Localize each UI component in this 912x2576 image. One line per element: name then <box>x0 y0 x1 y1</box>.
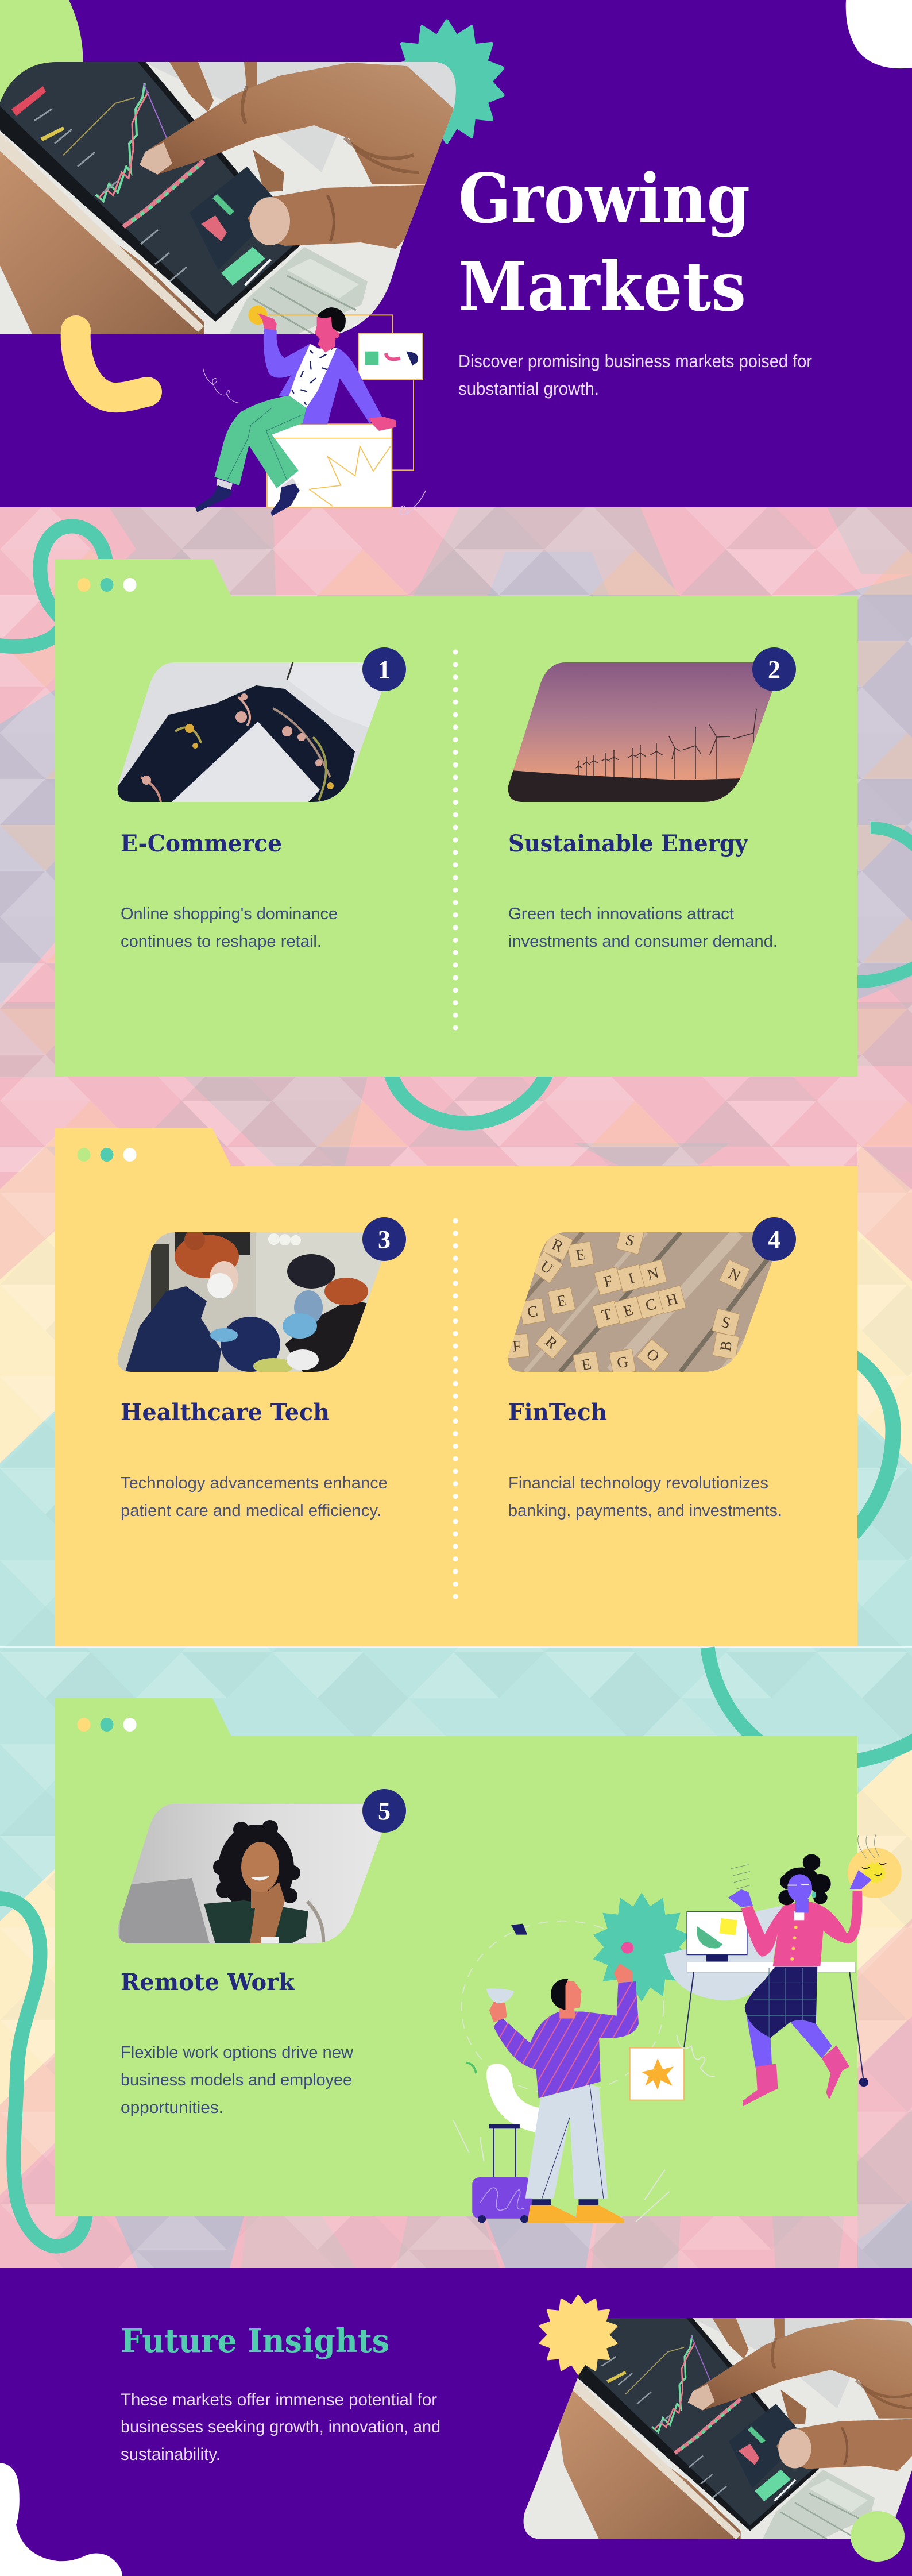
window dots <box>77 578 137 592</box>
panel: card 1 <box>55 559 857 1077</box>
photo: fintech scrabble tiles <box>508 1232 772 1372</box>
badge 5: 5 <box>378 1797 391 1825</box>
decorative teal rings <box>0 526 912 2246</box>
photo: fintech scrabble tiles: F <box>602 1272 615 1290</box>
decorative white blob <box>846 0 912 68</box>
heading: future insights: Future Insights <box>121 2322 389 2360</box>
text: fintech: Financial technology revolutionizes <box>508 1474 768 1493</box>
heading: healthcare tech: Healthcare Tech <box>121 1399 330 1426</box>
man figure <box>486 1964 639 2223</box>
photo: fintech scrabble tiles: B <box>717 1340 735 1352</box>
text: future insights: businesses seeking growth, innovation, and <box>121 2417 440 2436</box>
illustration: remote workers at desk <box>453 1834 902 2223</box>
photo: fintech scrabble tiles: C <box>643 1295 658 1314</box>
footer photo: phone trading chart <box>524 2318 912 2539</box>
text: e-commerce: continues to reshape retail. <box>121 932 322 951</box>
heading: fintech: FinTech <box>508 1399 607 1426</box>
title: Markets <box>458 246 746 326</box>
photo: fintech scrabble tiles: S <box>624 1231 636 1250</box>
heading: sustainable energy: Sustainable Energy <box>508 830 749 857</box>
photo: wind turbines at sunset <box>503 661 787 804</box>
text: fintech: banking, payments, and investments. <box>508 1502 782 1520</box>
photo: fintech scrabble tiles: E <box>580 1355 593 1374</box>
yellow starburst <box>532 2289 625 2380</box>
badge 3: 3 <box>378 1225 391 1254</box>
green circle <box>851 2511 905 2562</box>
photo: fintech scrabble tiles: O <box>643 1345 663 1366</box>
text: future insights <box>121 2390 440 2464</box>
green gear <box>582 1883 701 2011</box>
decorative green blob <box>0 0 83 115</box>
title: Growing <box>458 159 750 238</box>
heading: e-commerce: E-Commerce <box>121 830 282 857</box>
photo: fintech scrabble tiles: F <box>512 1337 522 1355</box>
decorative yellow crescent <box>76 330 147 398</box>
text: remote work <box>121 2043 354 2117</box>
photo: e-commerce scarf <box>115 661 399 804</box>
badge 2: 2 <box>768 655 780 684</box>
window dots <box>77 1718 137 1732</box>
badge 3 <box>362 1217 406 1261</box>
text: healthcare tech <box>121 1474 388 1520</box>
text: sustainable energy: investments and consumer demand. <box>508 932 778 951</box>
photo: fintech scrabble tiles: E <box>555 1291 568 1310</box>
photo: fintech scrabble tiles: N <box>726 1264 743 1285</box>
photo: fintech scrabble tiles: C <box>526 1302 539 1321</box>
photo: fintech scrabble tiles: R <box>542 1333 561 1352</box>
title <box>458 159 750 326</box>
sun <box>848 1834 902 1898</box>
text: healthcare tech: patient care and medical efficiency. <box>121 1502 381 1520</box>
photo: fintech scrabble tiles: R <box>549 1236 566 1255</box>
footer band <box>0 2268 912 2576</box>
badge 5 <box>362 1789 406 1833</box>
photo: fintech scrabble tiles: I <box>627 1269 636 1287</box>
photo: fintech scrabble tiles: E <box>621 1301 635 1320</box>
photo: fintech scrabble tiles: S <box>720 1313 732 1332</box>
illustration: man sitting on crate <box>195 306 426 516</box>
heading: remote work: Remote Work <box>121 1969 295 1996</box>
text: e-commerce <box>121 905 338 951</box>
text: sustainable energy: Green tech innovations attract <box>508 905 734 923</box>
subtitle: substantial growth. <box>458 379 599 399</box>
text: remote work: Flexible work options drive new <box>121 2043 354 2062</box>
dashed swirl <box>461 1921 663 2094</box>
text: remote work: opportunities. <box>121 2099 223 2117</box>
text: fintech <box>508 1474 782 1520</box>
badge 4: 4 <box>768 1225 780 1254</box>
white blob <box>0 2463 122 2576</box>
subtitle <box>458 351 812 399</box>
teal gear <box>378 10 515 153</box>
text: future insights: sustainability. <box>121 2445 221 2464</box>
small floating accents <box>453 1923 715 2222</box>
background: pink to yellow to teal section <box>0 507 912 1647</box>
subtitle: Discover promising business markets poised for <box>458 351 812 371</box>
photo: fintech scrabble tiles: T <box>600 1305 613 1324</box>
text: sustainable energy <box>508 905 778 951</box>
photo: fintech scrabble tiles: N <box>646 1264 660 1283</box>
woman figure <box>728 1854 872 2107</box>
text: healthcare tech: Technology advancements enhance <box>121 1474 388 1493</box>
photo: fintech scrabble tiles: E <box>574 1245 587 1264</box>
badge 1: 1 <box>378 655 391 684</box>
text: future insights: These markets offer immense potential for <box>121 2390 437 2409</box>
header band <box>0 0 912 507</box>
desk <box>684 1962 868 2087</box>
photo: remote worker portrait <box>115 1803 396 1945</box>
hero photo: phone trading chart <box>0 62 456 334</box>
photo: fintech scrabble tiles: H <box>664 1290 679 1309</box>
panel: card 3 <box>55 1698 857 2216</box>
text: remote work: business models and employee <box>121 2071 352 2089</box>
dotted divider <box>453 1221 458 1600</box>
background: teal to yellow to pink section <box>0 1646 912 2268</box>
panel: card 2 <box>55 1128 857 1646</box>
suitcase <box>472 2124 532 2223</box>
monitor <box>687 1912 747 1961</box>
photo: fintech scrabble tiles: U <box>537 1257 557 1278</box>
text: e-commerce: Online shopping's dominance <box>121 905 338 923</box>
photo: fintech scrabble tiles: G <box>616 1353 629 1371</box>
badge 2 <box>752 647 796 691</box>
photo: healthcare workers <box>115 1229 396 1374</box>
grey blob <box>664 1906 782 2000</box>
white crescent <box>486 2064 539 2132</box>
art card with star <box>630 2048 684 2100</box>
dotted divider <box>453 652 458 1031</box>
window dots <box>77 1148 137 1162</box>
badge 1 <box>362 647 406 691</box>
badge 4 <box>752 1217 796 1261</box>
